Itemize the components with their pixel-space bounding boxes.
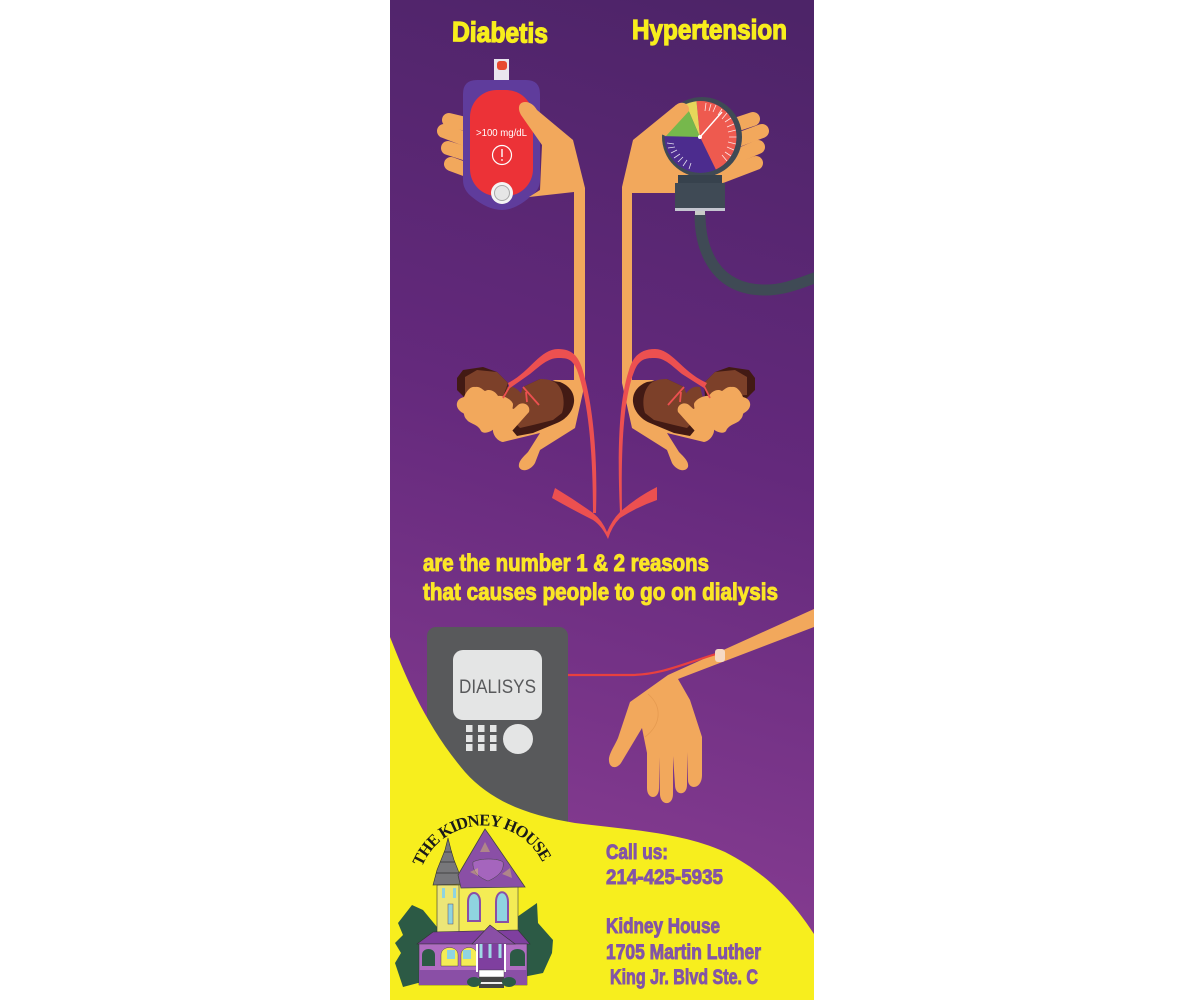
icon: hand holding blood pressure gauge (622, 97, 814, 340)
text block: number 1 and 2 reasons: that causes people to go on dialysis (423, 579, 778, 606)
gable roof (458, 829, 525, 888)
red tube (508, 349, 596, 513)
purple background panel (390, 0, 814, 1000)
glucose meter: >100 mg/dL (476, 127, 527, 139)
icon: left hand holding kidneys (457, 340, 596, 513)
front steps (467, 970, 516, 988)
infographic poster (390, 0, 814, 1000)
contact details (606, 841, 761, 989)
porch (417, 925, 530, 985)
text block: number 1 and 2 reasons: are the number 1 & 2 reasons (423, 550, 709, 577)
bushes (395, 905, 440, 987)
contact details: 1705 Martin Luther (606, 941, 761, 964)
gauge dial (662, 97, 742, 175)
contact details: Kidney House (606, 915, 720, 938)
rubber hose (700, 214, 820, 290)
icon: dialysis machine: DIALISYS (459, 677, 536, 698)
gauge base (675, 175, 725, 215)
contact details: 214-425-5935 (606, 866, 723, 889)
keypad (466, 725, 496, 751)
glucose meter (463, 59, 540, 210)
contact details: King Jr. Blvd Ste. C (610, 966, 758, 989)
logo arc title: THE KIDNEY HOUSE (412, 814, 552, 865)
icon: right hand holding kidneys (619, 340, 755, 513)
upper windows (468, 892, 508, 922)
text block: number 1 and 2 reasons (423, 550, 778, 606)
icon: hand holding glucose meter (444, 59, 585, 380)
yellow curved footer (390, 637, 814, 1000)
tower (433, 838, 462, 933)
arrow: converging red arrowhead (552, 487, 657, 539)
heading: Diabetis: Diabetis (452, 16, 548, 49)
icon: arm connected to tube (568, 609, 814, 803)
blood tube line (568, 654, 716, 675)
icon: dialysis machine (427, 627, 568, 857)
machine screen (453, 650, 542, 720)
main house body (459, 885, 518, 932)
logo: The Kidney House (395, 814, 553, 988)
heading: Hypertension: Hypertension (632, 14, 787, 45)
contact details: Call us: (606, 841, 668, 864)
thumb (650, 103, 689, 136)
